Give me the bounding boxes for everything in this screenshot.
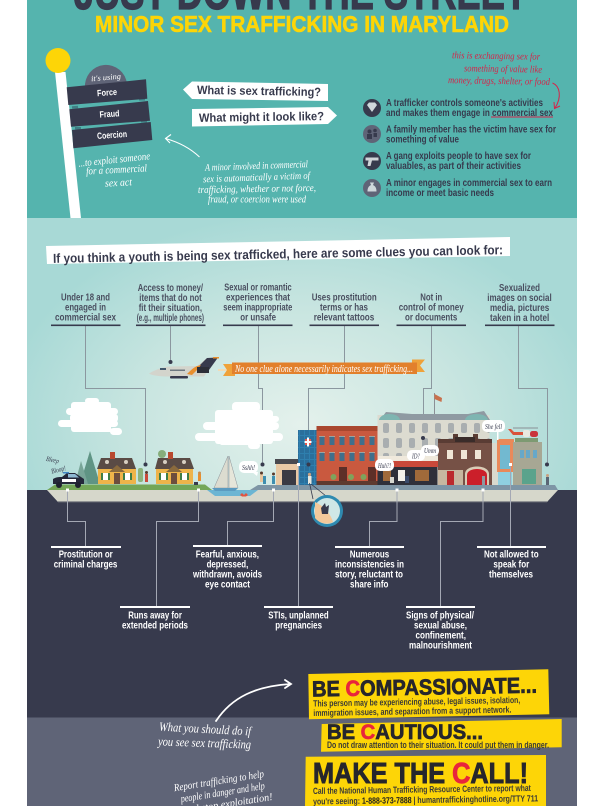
text: minor is automatically a victim: trafficking, whether or not force, (198, 183, 316, 196)
clue: access to money: fit their situation, (139, 303, 202, 314)
clue: romantic experiences: or unsafe (240, 312, 276, 324)
text: minor engages: income or meet basic needs (386, 188, 494, 199)
text: minor engages: A minor engages in commercial sex to earn (386, 178, 552, 189)
arrow: automatic victim note (166, 134, 200, 157)
sign: prostitution or criminal charges: criminal charges (54, 560, 118, 570)
speech: ID: ID? (411, 452, 420, 460)
text: minor is automatically a victim (198, 159, 316, 206)
signpost: Force (97, 87, 117, 98)
clue: sexualized images: images on social (487, 293, 552, 304)
text: report trafficking (172, 768, 274, 806)
note: commercial sex definition: money, drugs, shelter, or food (448, 75, 551, 88)
clue: access to money: Access to money/ (138, 283, 203, 294)
arrow: to action boxes (216, 680, 291, 721)
clue: sexualized images: Sexualized (499, 283, 540, 294)
panel: clues sky background (27, 218, 577, 490)
text: to exploit someone: ...to exploit someone (78, 151, 151, 170)
text: what you should do (156, 720, 253, 752)
sign: not allowed to speak: themselves (489, 570, 533, 580)
text: minor is automatically a victim: fraud, or coercion were used (208, 194, 307, 206)
sign: inconsistencies: Numerous (350, 550, 389, 560)
clue: access to money (136, 283, 206, 326)
list: scenarios of trafficking (363, 98, 556, 199)
icon: gun (363, 152, 381, 170)
icon: tattoo magnifier (310, 483, 343, 527)
sign: physical abuse: confinement, (416, 630, 466, 642)
callout: be compassionate: BE COMPASSIONATE... (312, 673, 537, 702)
note: commercial sex definition: something of value like (464, 63, 543, 76)
icon: orange glass tower (492, 439, 514, 485)
connector dots: ground side (66, 463, 512, 492)
sign: inconsistencies: inconsistencies in (335, 560, 404, 570)
callout: be cautious (321, 719, 562, 752)
speech: she fell: She fell (485, 423, 502, 431)
text: family member: A family member has the victim have sex for (386, 124, 556, 136)
text: to exploit someone: for a commercial (86, 163, 147, 178)
sign: fearful: withdrawn, avoids (192, 570, 262, 580)
text: trafficker: A trafficker controls someone's activities (386, 98, 543, 109)
clue: prostitution terms: terms or has (320, 302, 368, 314)
signpost: Coercion (97, 129, 127, 141)
cloud: right (195, 402, 283, 449)
text: gang: valuables, as part of their activities (386, 161, 521, 172)
note: commercial sex definition: this is exchanging sex for (452, 50, 540, 63)
sign: not allowed to speak: speak for (493, 560, 529, 570)
text: report trafficking: people in danger and help (179, 781, 266, 805)
sign: prostitution or criminal charges: Prostitution or (59, 550, 113, 560)
text: gang: A gang exploits people to have sex for (386, 151, 531, 162)
panel: what is trafficking background (27, 0, 577, 218)
callout: be compassionate: immigration issues, and separation from a support network. (313, 705, 511, 718)
speech: blerp bloop: Bleep (45, 455, 60, 465)
sign: not allowed to speak: Not allowed to (484, 550, 539, 560)
sign: physical abuse: Signs of physical/ (406, 610, 474, 622)
icon: money bag (363, 179, 381, 197)
sign: runs away: extended periods (122, 620, 188, 632)
banner: no one clue (223, 360, 425, 376)
speech: shhh (239, 461, 258, 476)
icon: people on lawn (145, 471, 201, 485)
sign: runs away: Runs away for (128, 610, 182, 622)
icon: green-grey building and helicopter (508, 428, 542, 485)
speech: she fell (482, 420, 505, 440)
connector dots: sky side (144, 436, 549, 466)
sign: fearful: eye contact (205, 580, 250, 590)
text: what you should do: you see sex trafficking (156, 734, 251, 752)
clue: under 18: Under 18 and (61, 292, 110, 304)
text: minor is automatically a victim: sex is automatically a victim of (203, 171, 311, 185)
icon: house two (155, 452, 194, 484)
sign: physical abuse (406, 606, 475, 652)
signpost (46, 48, 152, 218)
callout: make the call: Call the National Human Trafficking Resource Center to report what (313, 783, 531, 796)
connector lines: upper clues (86, 325, 548, 464)
sign: stis (264, 606, 333, 632)
callout: be compassionate (308, 669, 549, 719)
text: minor is automatically a victim: A minor involved in commercial (204, 159, 308, 174)
icon: family (363, 125, 381, 143)
icon: people in town (308, 473, 549, 485)
clue: romantic experiences (223, 282, 292, 326)
speech: blerp bloop (45, 455, 67, 476)
icon: red brick building (316, 426, 378, 485)
text: trafficker: and makes them engage in commercial sex (386, 108, 553, 119)
callout: make the call: MAKE THE CALL! (313, 758, 528, 790)
clue: under 18: commercial sex (55, 312, 116, 324)
text: report trafficking: Report trafficking to help (172, 769, 265, 794)
panel: dark ground background (27, 490, 577, 718)
text: to exploit someone: sex act (105, 177, 133, 190)
clue: romantic experiences: Sexual or romantic (224, 282, 292, 294)
sign: runs away (120, 606, 190, 632)
clue: romantic experiences: experiences that (226, 292, 290, 304)
speech: shhh: Sshh! (242, 464, 256, 472)
clue: access to money: (e.g., multiple phones) (137, 313, 204, 324)
clue: prostitution terms: Uses prostitution (312, 292, 377, 304)
text: minor engages (386, 178, 552, 199)
sign: not allowed to speak (477, 546, 546, 580)
sign: fearful (192, 545, 262, 590)
ground (47, 484, 558, 503)
clue: not in control: Not in (420, 292, 442, 304)
icon: trees (75, 450, 166, 484)
clue: access to money: items that do not (139, 293, 202, 304)
clue: prostitution terms: relevant tattoos (314, 312, 374, 324)
callout: be compassionate: This person may be experiencing abuse, legal issues, isolation, (313, 695, 520, 709)
clue: under 18: engaged in (65, 302, 106, 314)
sign: fearful: depressed, (207, 560, 248, 570)
icon: diamond (363, 99, 381, 117)
banner: no one clue: No one clue alone necessarily indicates sex trafficking... (234, 364, 413, 375)
speech: huh: Huh?! (377, 462, 391, 470)
clue: not in control: control of money (399, 302, 464, 314)
callout: be cautious: BE CAUTIOUS... (327, 720, 483, 744)
text: what you should do: What you should do if (159, 720, 253, 738)
signpost: Fraud (99, 108, 120, 120)
speech: huh (375, 459, 394, 471)
sign: inconsistencies (335, 546, 404, 590)
text: trafficker (386, 98, 553, 119)
icon: people on pavement (260, 472, 275, 484)
sign: physical abuse: sexual abuse, (414, 620, 467, 632)
clue: sexualized images: media, pictures (490, 303, 549, 314)
text: family member (386, 124, 556, 146)
sign: prostitution or criminal charges (51, 546, 121, 570)
icon: blue glass building (298, 430, 317, 485)
clue: romantic experiences: seem inappropriate (223, 302, 292, 314)
speech: umm (421, 445, 439, 456)
signpost: it's using (91, 72, 121, 83)
sign: fearful: Fearful, anxious, (196, 550, 259, 560)
text: gang (386, 151, 531, 172)
icon: small hotel building (275, 459, 300, 485)
icon: airplane (149, 357, 232, 378)
note: commercial sex definition (448, 50, 560, 118)
question tag: what might it look like: What might it look like? (199, 109, 324, 125)
icon: house one (97, 452, 136, 484)
sign: stis: pregnancies (275, 620, 322, 632)
speech: blerp bloop: Bloop! (50, 464, 67, 476)
clue: not in control (396, 292, 466, 326)
clue: prostitution terms (310, 292, 379, 326)
callout: make the call (305, 755, 546, 806)
icon: grand hotel (378, 393, 490, 485)
clue: sexualized images (485, 283, 554, 326)
clue: sexualized images: taken in a hotel (490, 313, 549, 324)
question tag: what is sex trafficking: What is sex trafficking? (197, 83, 321, 99)
heading: clues banner: If you think a youth is being sex trafficked, here are some clues you can look for: (53, 242, 503, 266)
sign: physical abuse: malnourishment (409, 640, 472, 652)
clue: under 18 (51, 292, 120, 326)
icon: police car (53, 472, 84, 488)
panel: what to do background (27, 718, 577, 806)
icon: sailboat (212, 456, 238, 491)
speech: ID (407, 450, 425, 461)
cloud: left (58, 398, 122, 435)
clue: not in control: or documents (405, 312, 457, 324)
subtitle: MINOR SEX TRAFFICKING IN MARYLAND (95, 11, 509, 37)
speech: umm: Umm (424, 447, 436, 455)
icon: fire station (438, 434, 492, 485)
sign: inconsistencies: share info (350, 580, 388, 590)
sign: stis: STIs, unplanned (268, 610, 329, 622)
text: family member: something of value (386, 134, 459, 146)
text: to exploit someone (78, 151, 151, 190)
connector lines: lower signs (68, 464, 510, 607)
sign: inconsistencies: story, reluctant to (335, 570, 403, 580)
